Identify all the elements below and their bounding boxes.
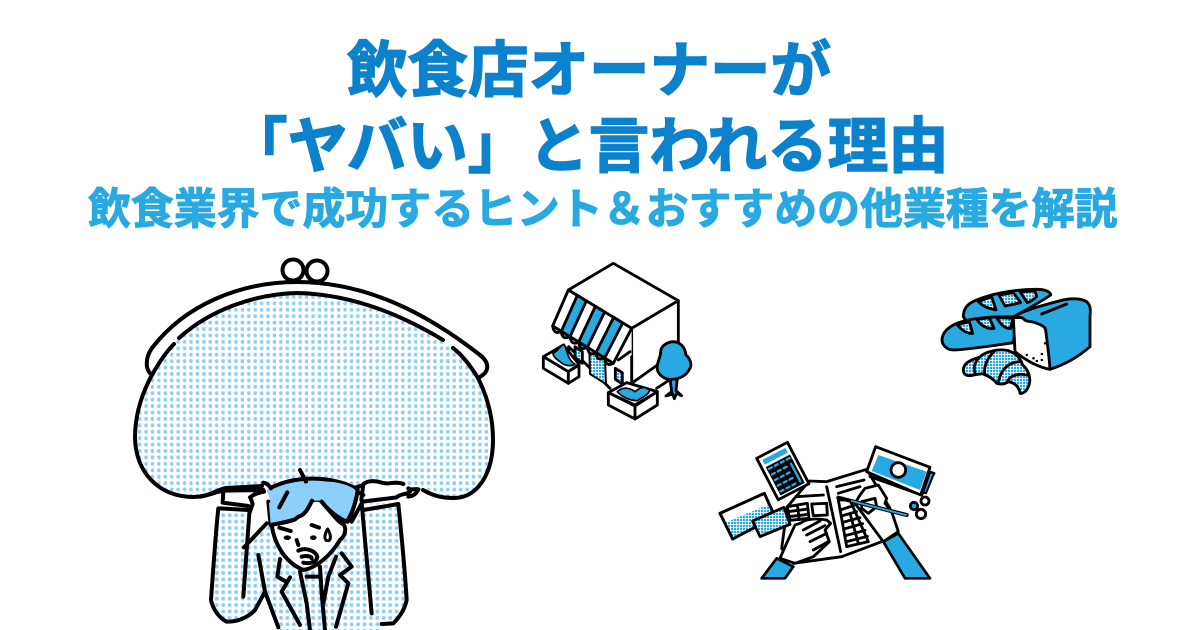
right sleeve — [883, 533, 930, 578]
left planter — [543, 344, 579, 383]
right hand — [352, 482, 418, 523]
tree — [657, 342, 691, 399]
illustration: bookkeeping desk — [720, 442, 934, 578]
right sleeve — [362, 503, 407, 624]
torso and arms dots — [211, 503, 407, 630]
ledger — [782, 469, 890, 563]
collar and tie — [277, 553, 352, 630]
illustration: breads — [942, 289, 1090, 393]
face — [272, 500, 345, 570]
left hand — [220, 490, 268, 510]
store door and windows — [589, 350, 606, 384]
illustration: store front — [543, 263, 691, 419]
loaf crumbs — [1027, 343, 1045, 361]
front baguette — [942, 317, 1017, 350]
back baguette score marks — [978, 291, 1037, 310]
left hand — [780, 519, 831, 563]
left sleeve — [211, 508, 278, 627]
title line 2: 「ヤバい」と言われる理由 — [227, 112, 949, 180]
cards — [720, 493, 790, 539]
purse body dots — [135, 293, 493, 498]
loaf side — [1013, 299, 1090, 369]
loaf face — [1013, 317, 1050, 369]
right hand — [855, 485, 898, 542]
scissors — [910, 497, 929, 519]
right planter — [608, 383, 657, 419]
eyes and brows — [279, 525, 319, 563]
square box — [812, 503, 827, 516]
hair front — [269, 482, 357, 525]
back baguette — [963, 289, 1051, 322]
money — [867, 447, 934, 495]
awning — [553, 290, 632, 365]
man (body, arms, head) — [200, 470, 418, 630]
croissant — [963, 350, 1030, 393]
sweat drop — [325, 529, 330, 541]
hair — [267, 479, 357, 525]
front baguette score marks — [957, 317, 1013, 333]
pencil — [838, 498, 907, 515]
calculator — [757, 442, 809, 500]
purse outline — [135, 282, 493, 498]
left hand fingers — [803, 521, 828, 550]
store walls — [568, 263, 678, 328]
left table — [787, 503, 809, 520]
subtitle: 飲食業界で成功するヒント＆おすすめの他業種を解説 — [88, 186, 1117, 234]
title line 1: 飲食店オーナーが — [347, 36, 831, 104]
left sleeve — [762, 558, 793, 578]
right table — [838, 500, 868, 547]
illustration: man holding up a coin purse — [135, 260, 493, 630]
purse clasp — [282, 260, 328, 282]
